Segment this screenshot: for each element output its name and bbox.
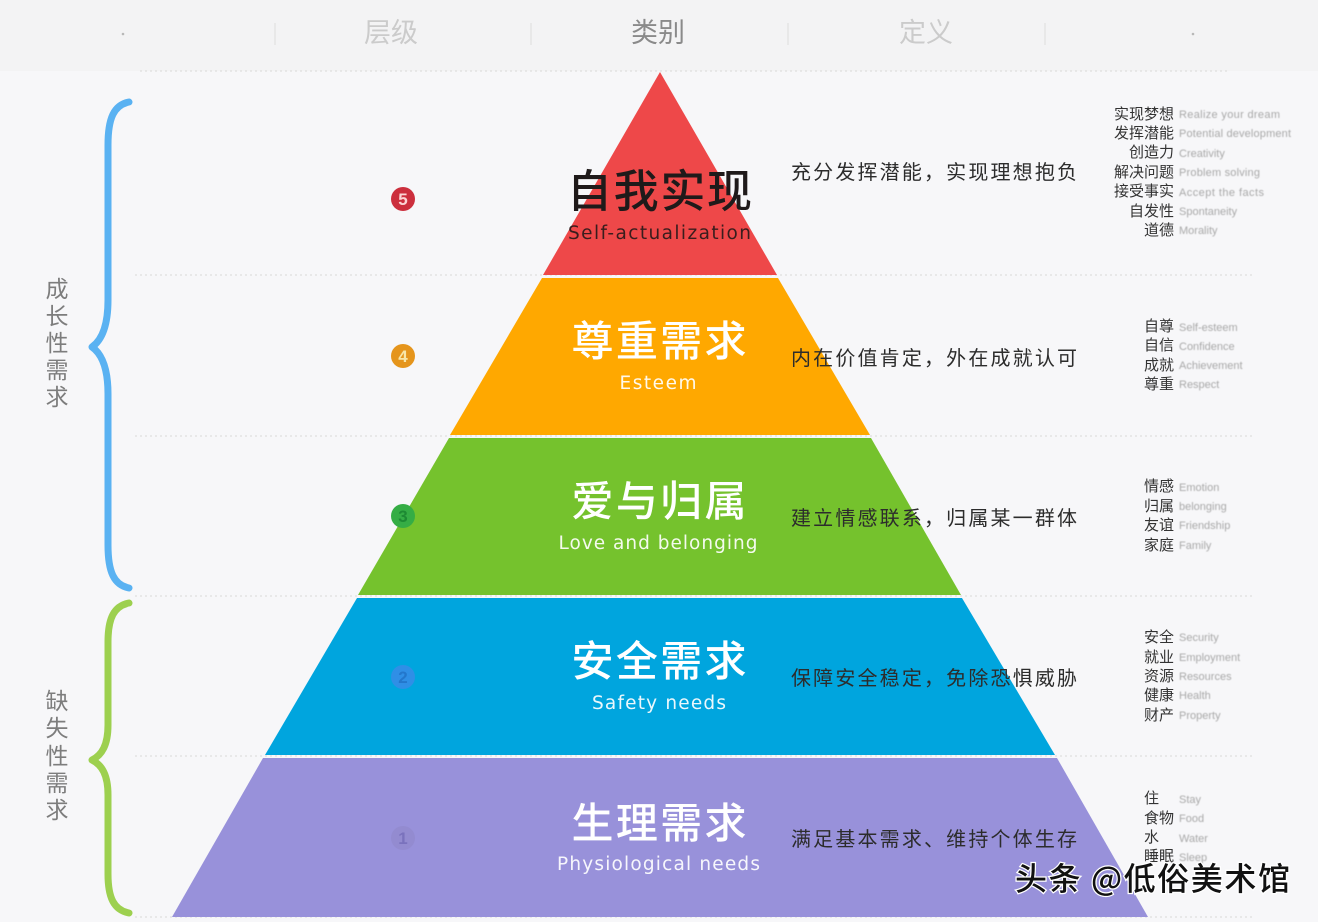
growth needs label: 求 <box>46 378 68 412</box>
keyword list: esteem: Self-esteem <box>1179 322 1238 334</box>
keyword list: self-actualization: Problem solving <box>1179 167 1260 179</box>
level badge 3 <box>391 504 415 528</box>
tier 2 blue <box>265 598 1055 755</box>
keyword list: physiological: 住 <box>1144 787 1159 808</box>
keyword list: self-actualization: 自发性 <box>1129 200 1174 221</box>
keyword list: self-actualization: 解决问题 <box>1114 161 1174 182</box>
tier 1 purple <box>172 758 1148 917</box>
level badge 5 <box>391 187 415 211</box>
keyword list: safety: Employment <box>1179 652 1240 664</box>
keyword list: self-actualization: 发挥潜能 <box>1114 122 1174 143</box>
keyword list: esteem: 自尊 <box>1144 315 1174 336</box>
growth needs label <box>46 270 68 412</box>
tier 2 heading: Safety needs <box>592 693 726 714</box>
level badge 2: 2 <box>398 668 408 687</box>
level badge 2 <box>391 665 415 689</box>
keyword list: self-actualization: Potential development <box>1179 128 1291 140</box>
keyword list: esteem <box>1144 315 1243 394</box>
tier 3 green <box>358 438 961 595</box>
keyword list: esteem: 尊重 <box>1144 373 1174 394</box>
keyword list: safety <box>1144 626 1240 725</box>
header row: 层级 <box>364 11 418 50</box>
keyword list: self-actualization: Realize your dream <box>1179 109 1280 121</box>
keyword list: self-actualization: Accept the facts <box>1179 187 1264 199</box>
keyword list: love and belonging: Friendship <box>1179 520 1230 532</box>
definitions: 充分发挥潜能，实现理想抱负 <box>791 156 1077 185</box>
header row <box>0 0 1318 71</box>
growth needs label: 成 <box>46 270 68 304</box>
keyword list: safety: 安全 <box>1144 626 1174 647</box>
keyword list: love and belonging: 归属 <box>1144 495 1174 516</box>
definitions: 保障安全稳定，免除恐惧威胁 <box>791 662 1077 691</box>
keyword list: self-actualization: 实现梦想 <box>1114 103 1174 124</box>
keyword list: safety: 财产 <box>1144 704 1174 725</box>
deficiency needs label: 求 <box>46 791 68 825</box>
definitions <box>791 156 1077 852</box>
growth needs label: 需 <box>46 351 68 385</box>
keyword list: physiological: 食物 <box>1144 807 1174 828</box>
growth needs label: 长 <box>46 297 68 331</box>
keyword list: love and belonging: Emotion <box>1179 482 1219 494</box>
definitions: 内在价值肯定，外在成就认可 <box>791 342 1077 371</box>
deficiency needs label <box>46 682 68 825</box>
keyword list: self-actualization: 创造力 <box>1129 141 1174 162</box>
deficiency needs label: 性 <box>46 737 68 771</box>
header row: 类别 <box>631 11 685 50</box>
growth needs label: 性 <box>46 324 68 358</box>
keyword list: safety: 健康 <box>1144 684 1174 705</box>
keyword list: safety: Health <box>1179 690 1211 702</box>
keyword list: safety: Resources <box>1179 671 1232 683</box>
tier 5 heading: 自我实现 <box>567 155 752 220</box>
keyword list: esteem: 自信 <box>1144 334 1174 355</box>
keyword list: love and belonging: 家庭 <box>1144 534 1174 555</box>
keyword list: esteem: Confidence <box>1179 341 1235 353</box>
keyword list: safety: Security <box>1179 632 1219 644</box>
keyword list: safety: Property <box>1179 710 1221 722</box>
header row: 定义 <box>899 11 953 50</box>
keyword list: physiological: 水 <box>1144 826 1159 847</box>
keyword list: self-actualization: Morality <box>1179 225 1218 237</box>
tier 3 heading: 爱与归属 <box>572 468 746 529</box>
keyword list: love and belonging: 友谊 <box>1144 514 1174 535</box>
growth needs brace <box>92 102 129 588</box>
tier 4 heading: Esteem <box>620 373 696 394</box>
keyword list: esteem: Achievement <box>1179 360 1243 372</box>
tier 5 red <box>543 72 777 275</box>
definitions: 建立情感联系，归属某一群体 <box>791 502 1077 531</box>
tier 1 heading: Physiological needs <box>557 854 760 875</box>
deficiency needs label: 缺 <box>46 682 68 716</box>
keyword list: love and belonging <box>1144 475 1230 555</box>
keyword list: self-actualization: 接受事实 <box>1114 180 1174 201</box>
tier 4 heading: 尊重需求 <box>572 308 746 369</box>
keyword list: physiological: Sleep <box>1179 852 1207 864</box>
keyword list: self-actualization: Spontaneity <box>1179 206 1238 218</box>
keyword list: self-actualization <box>1114 103 1291 240</box>
keyword list: physiological: Water <box>1179 833 1208 845</box>
tier 2 heading: 安全需求 <box>572 628 746 689</box>
level badge 5: 5 <box>398 190 408 209</box>
level badge 1: 1 <box>398 829 408 848</box>
tier 5 heading: Self-actualization <box>568 223 751 244</box>
deficiency needs label: 需 <box>46 764 68 798</box>
keyword list: physiological <box>1144 787 1208 866</box>
keyword list: love and belonging: belonging <box>1179 501 1227 513</box>
keyword list: physiological: Food <box>1179 813 1204 825</box>
keyword list: love and belonging: Family <box>1179 540 1212 552</box>
level badge 4: 4 <box>398 347 408 366</box>
definitions: 满足基本需求、维持个体生存 <box>791 823 1077 852</box>
keyword list: esteem: 成就 <box>1144 354 1174 375</box>
pyramid <box>172 72 1148 917</box>
level badge 4 <box>391 344 415 368</box>
tier 4 orange <box>450 278 870 435</box>
tier 3 heading <box>558 468 758 554</box>
deficiency needs brace <box>92 603 129 913</box>
tier 1 heading: 生理需求 <box>572 790 746 851</box>
tier 3 heading: Love and belonging <box>558 533 758 554</box>
level badge 1 <box>391 826 415 850</box>
keyword list: safety: 就业 <box>1144 646 1174 667</box>
tier 1 heading <box>557 790 760 875</box>
keyword list: love and belonging: 情感 <box>1144 475 1174 496</box>
keyword list: physiological: Stay <box>1179 794 1202 806</box>
keyword list: esteem: Respect <box>1179 379 1219 391</box>
keyword list: self-actualization: 道德 <box>1144 219 1174 240</box>
deficiency needs label: 失 <box>46 709 68 743</box>
watermark: 头条 @低俗美术馆 <box>1015 854 1290 900</box>
keyword list: physiological: 睡眠 <box>1144 845 1174 866</box>
keyword list: safety: 资源 <box>1144 665 1174 686</box>
level badge 3: 3 <box>398 507 408 526</box>
keyword list: self-actualization: Creativity <box>1179 148 1225 160</box>
